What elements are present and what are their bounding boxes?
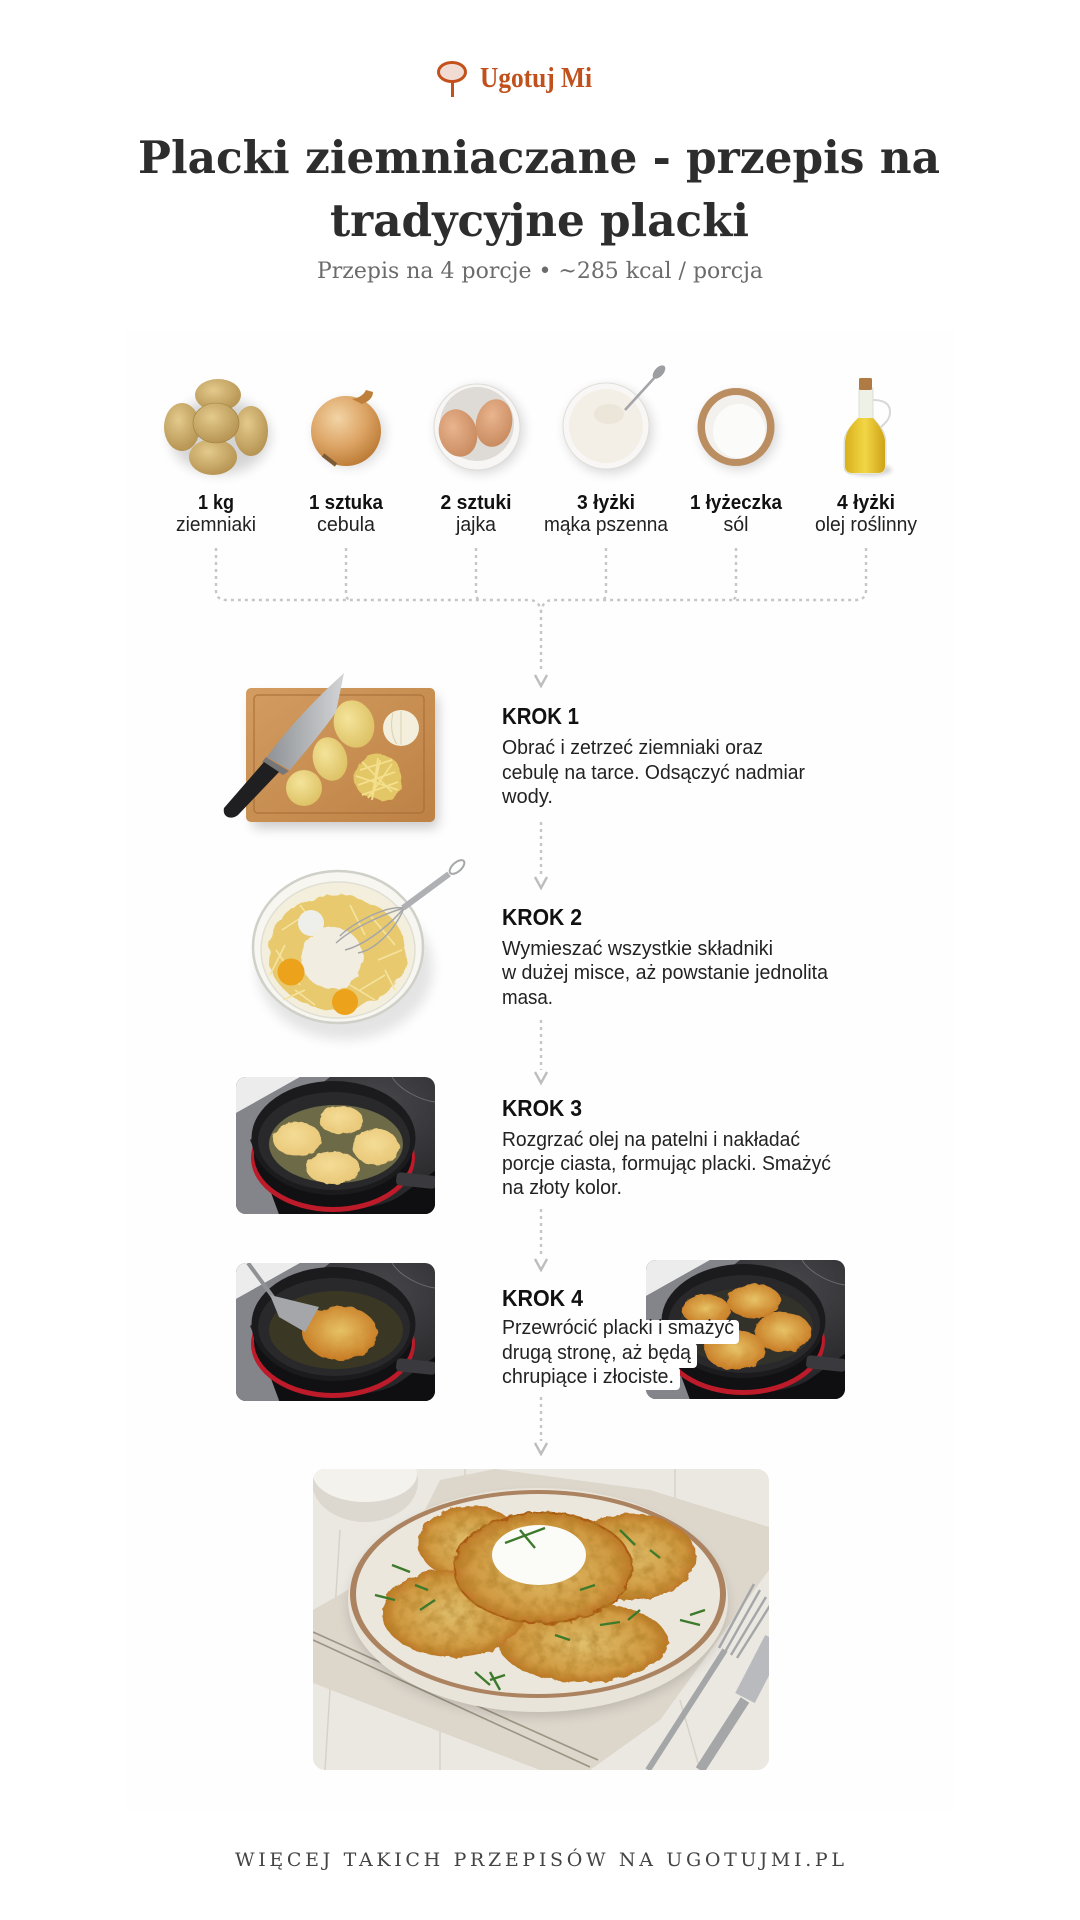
step 4 photo: fried fritters (646, 1260, 847, 1400)
title (138, 131, 940, 247)
dill (375, 1528, 705, 1690)
ingredient label: salt: sól (724, 514, 748, 536)
logo wordmark: Ugotuj Mi (480, 63, 592, 94)
step 4 description with highlight boxes: drugą stronę, aż będą (502, 1342, 692, 1364)
infographic canvas (140, 61, 939, 1870)
sour cream (492, 1525, 586, 1585)
icon: eggs in bowl (433, 384, 523, 473)
logo icon: magnifier spoon (438, 62, 466, 97)
ingredient label: flour: 3 łyżki (577, 492, 635, 514)
subtitle: Przepis na 4 porcje • ~285 kcal / porcja (317, 259, 763, 284)
step 1 illustration: cutting board (224, 673, 438, 828)
ingredient label: onion: cebula (317, 514, 376, 536)
step 2 text: masa. (502, 987, 553, 1009)
step 1 text: cebulę na tarce. Odsączyć nadmiar (502, 762, 805, 784)
arrow: step 2 to 3 (535, 1020, 547, 1083)
step 2 text: KROK 2 (502, 904, 582, 930)
ingredient label: eggs (440, 492, 512, 536)
step 2 text (501, 904, 829, 1009)
ingredient label: potatoes: 1 kg (198, 492, 234, 514)
ingredient label: potatoes (176, 492, 256, 536)
step 3 text (502, 1095, 831, 1199)
panel: ingredients (164, 363, 917, 536)
ingredient label: oil (815, 492, 917, 536)
icon: potatoes (164, 379, 270, 475)
logo (438, 62, 592, 97)
ingredient label: oil: 4 łyżki (837, 492, 895, 514)
step 3 text: porcje ciasta, formując placki. Smażyć (502, 1153, 831, 1175)
ingredient label: onion (309, 492, 384, 536)
cutlery (648, 1584, 775, 1770)
step 4 description with highlight boxes: Przewrócić placki i smażyć (502, 1317, 734, 1339)
ingredient label: onion: 1 sztuka (309, 492, 384, 514)
title: tradycyjne placki (330, 194, 749, 247)
fritters (382, 1506, 696, 1682)
step 1 text (501, 703, 805, 808)
step 4 description with highlight boxes (502, 1317, 739, 1390)
icon: onion (311, 390, 385, 467)
title: Placki ziemniaczane - przepis na (138, 131, 940, 184)
step 1 text: Obrać i zetrzeć ziemniaki oraz (502, 737, 763, 759)
step 3 text: na złoty kolor. (502, 1177, 622, 1199)
arrow: step 3 to 4 (535, 1209, 547, 1270)
finished dish photo (312, 1442, 775, 1770)
napkin (313, 1469, 769, 1770)
ingredient label: salt (690, 492, 783, 536)
ingredient label: potatoes: ziemniaki (176, 514, 256, 536)
step 2 illustration: bowl with whisk (253, 858, 467, 1040)
step 4 description with highlight boxes: chrupiące i złociste. (502, 1366, 674, 1388)
ingredient label: salt: 1 łyżeczka (690, 492, 783, 514)
faint background panel (125, 330, 955, 1810)
step 3 text: Rozgrzać olej na patelni i nakładać (502, 1129, 800, 1151)
step 2 text: w dużej misce, aż powstanie jednolita (501, 962, 829, 984)
step 3 photo: pan with raw fritters (236, 1077, 437, 1217)
step 4 heading: KROK 4 (502, 1285, 583, 1311)
ingredient label: eggs: jajka (455, 514, 497, 536)
step 2 text: Wymieszać wszystkie składniki (502, 938, 773, 960)
arrow: step 1 to 2 (535, 822, 547, 888)
sour cream bowl (313, 1469, 418, 1522)
icon: salt bowl (698, 388, 777, 469)
arrow: step 4 to finished dish (535, 1397, 547, 1454)
footer: WIĘCEJ TAKICH PRZEPISÓW NA UGOTUJMI.PL (235, 1848, 844, 1871)
ingredient label: flour: mąka pszenna (544, 514, 669, 536)
step 3 text: KROK 3 (502, 1095, 582, 1121)
icon: oil bottle (844, 378, 892, 476)
ingredient label: oil: olej roślinny (815, 514, 917, 536)
step 4 photo: flipping fritter (236, 1263, 437, 1403)
icon: flour with spoon (563, 363, 668, 473)
ingredient label: eggs: 2 sztuki (440, 492, 512, 514)
connector: ingredients to step 1 (216, 548, 866, 686)
step 1 text: wody. (501, 786, 553, 808)
ingredient label: flour (544, 492, 669, 536)
plate (346, 1573, 730, 1720)
step 1 text: KROK 1 (502, 703, 579, 729)
